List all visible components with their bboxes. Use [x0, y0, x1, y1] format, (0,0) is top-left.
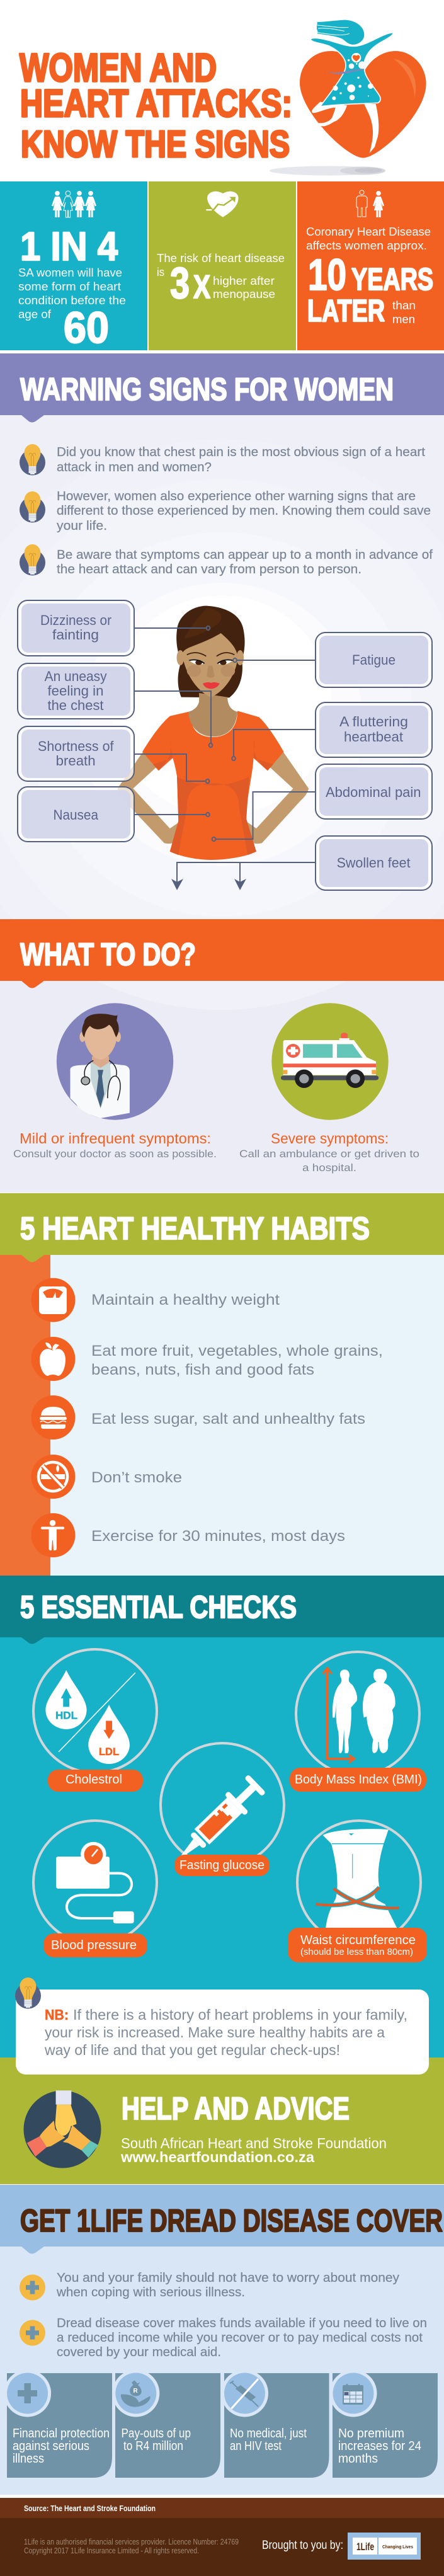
logo: 1Life: [348, 2533, 421, 2560]
panel: 3x higher risk statistic: [149, 181, 296, 350]
habit: eat more fruit and vegetables: [31, 1337, 383, 1381]
label: uneasy feeling in the chest: the chest: [48, 697, 103, 713]
label: shortness of breath: breath: [56, 753, 96, 769]
stat: 10 years later: LATER: [307, 294, 385, 328]
card: financial protection: illness: [13, 2452, 44, 2466]
text: SA women statistic: some form of heart: [18, 280, 121, 293]
card: financial protection: [4, 2370, 112, 2478]
callout: NB family history: If there is a history of heart problems in your family,: [73, 2006, 407, 2023]
stat: 3x: X: [193, 269, 210, 306]
text: mild symptoms: Consult your doctor as soon as possible.: [13, 1148, 217, 1160]
habit: maintain a healthy weight: [31, 1278, 280, 1322]
stat: 3x: 3: [170, 258, 190, 307]
section header: habits: 5 HEART HEALTHY HABITS: [20, 1211, 370, 1246]
text: coronary heart disease: than: [392, 299, 416, 312]
panel: 1 in 4 statistic: [0, 181, 147, 352]
title: WOMEN AND: [20, 46, 217, 90]
point: no worry about money: [20, 2271, 399, 2301]
label: abdominal pain: Abdominal pain: [326, 784, 421, 800]
label: nausea: [18, 787, 134, 842]
habit: don't smoke: [31, 1455, 182, 1499]
habit: eat more fruit and vegetables: Eat more fruit, vegetables, whole grains,: [91, 1342, 383, 1360]
icon: heart with rising arrow: [206, 192, 239, 217]
text: severe symptoms: Severe symptoms:: [271, 1130, 389, 1147]
logo: 1Life: 1Life: [356, 2541, 374, 2553]
card: no premium increases: No premium: [338, 2427, 404, 2441]
card: pay-outs: R: [134, 2388, 139, 2395]
point: funds available: a reduced income while you recover or to pay medical costs not: [57, 2331, 423, 2345]
panel: 1Life dread disease cover: [0, 2185, 444, 2495]
card: no premium increases: months: [338, 2452, 378, 2466]
label: uneasy feeling in the chest: An uneasy: [45, 668, 107, 684]
text: legal: Copyright 2017 1Life Insurance Limited - All rights reserved.: [24, 2546, 199, 2555]
check: blood pressure: Blood pressure: [51, 1938, 137, 1952]
panel: 5 essential checks: [0, 1576, 444, 2058]
check: cholesterol: LDL: [99, 1746, 119, 1758]
tip 1: attack in men and women?: [57, 461, 212, 474]
icon: ambulance: [271, 1003, 389, 1120]
tip 1: Did you know that chest pain is the most obvious sign of a heart: [57, 445, 425, 459]
card: no medical: No medical, just: [230, 2427, 307, 2441]
text: severe symptoms: Call an ambulance or get driven to: [239, 1148, 419, 1160]
text: foundation: [120, 2135, 387, 2165]
card: pay-outs: Pay-outs of up: [121, 2427, 191, 2441]
habit: exercise: Exercise for 30 minutes, most days: [91, 1528, 345, 1545]
text: coronary heart disease: Coronary Heart Disease: [306, 225, 431, 238]
label: uneasy feeling in the chest: feeling in: [48, 683, 103, 699]
label: fluttering heartbeat: heartbeat: [344, 729, 403, 745]
callout: NB family history: way of life and that you get regular check-ups!: [44, 2042, 340, 2058]
section header: habits: [0, 1193, 444, 1262]
text: SA women statistic: age of: [18, 307, 52, 321]
stat: 3x: [170, 258, 210, 307]
check: body mass index: [290, 1652, 426, 1792]
card: financial protection: against serious: [13, 2439, 89, 2453]
panel: help and advice: [0, 2058, 444, 2184]
panel: warning signs for women: [0, 353, 444, 919]
habit: exercise: [31, 1513, 345, 1557]
check: cholesterol: Cholestrol: [65, 1773, 122, 1787]
label: shortness of breath: [18, 726, 134, 781]
section header: dread disease cover: [0, 2185, 444, 2254]
text: risk of heart disease: higher after: [213, 274, 275, 287]
icon: four women: [52, 191, 96, 217]
title: KNOW THE SIGNS: [21, 123, 290, 165]
label: dizziness or fainting: fainting: [52, 627, 99, 643]
section header: warning signs: [0, 353, 444, 422]
text: SA women statistic: condition before the: [18, 294, 126, 307]
illustration: woman: [118, 606, 309, 860]
habit: don't smoke: Don’t smoke: [91, 1469, 182, 1486]
text: risk of heart disease: is: [157, 265, 164, 278]
callout: NB family history: NB:: [45, 2006, 69, 2023]
tip 2: your life.: [57, 519, 107, 533]
point: funds available: [20, 2316, 427, 2359]
tip 2: [20, 489, 431, 533]
card: pay-outs: to R4 million: [123, 2439, 183, 2453]
text: coronary heart disease: men: [392, 312, 415, 326]
check: fasting glucose: Fasting glucose: [179, 1858, 265, 1872]
panel: what to do: [0, 919, 444, 1193]
stat: 60: 60: [64, 303, 109, 352]
text: coronary heart disease: affects women approx.: [306, 239, 427, 252]
habit: maintain a healthy weight: Maintain a healthy weight: [91, 1291, 280, 1308]
callout: NB family history: [15, 1978, 429, 2075]
point: funds available: Dread disease cover makes funds available if you need to live on: [57, 2316, 427, 2330]
text: risk of heart disease: [157, 251, 285, 301]
title: [20, 46, 292, 165]
section header: checks: [0, 1576, 444, 1644]
habit: eat less sugar, salt and fat: [31, 1395, 365, 1440]
card: financial protection: Financial protection: [13, 2427, 110, 2441]
point: no worry about money: when coping with serious illness.: [56, 2286, 245, 2299]
card: no medical: [221, 2370, 329, 2478]
logo: 1Life: Changing Lives: [382, 2544, 413, 2550]
label: dizziness or fainting: [18, 600, 134, 656]
label: uneasy feeling in the chest: [18, 663, 134, 719]
label: fluttering heartbeat: A fluttering: [339, 714, 408, 730]
point: no worry about money: You and your family should not have to worry about money: [57, 2271, 399, 2285]
footer: [0, 2498, 444, 2576]
label: fluttering heartbeat: [316, 702, 432, 757]
check: waist circumference: (should be less than 80cm): [300, 1947, 413, 1957]
tip 2: However, women also experience other warning signs that are: [57, 489, 416, 503]
tip 3: [20, 544, 433, 576]
check: waist circumference: Waist circumference: [300, 1933, 416, 1947]
text: legal: 1Life is an authorised financial services provider. Licence Number: 24769: [24, 2538, 239, 2546]
tip 2: different to those experienced by men. Knowing them could save: [57, 504, 431, 518]
tip 1: [20, 444, 425, 475]
label: abdominal pain: [316, 764, 432, 819]
callout: NB family history: your risk is increased. Make sure healthy habits are a: [45, 2024, 385, 2041]
check: cholesterol: HDL: [55, 1710, 77, 1721]
stat: 1 in 4: 1 IN 4: [20, 224, 118, 269]
habit: eat less sugar, salt and fat: Eat less sugar, salt and unhealthy fats: [91, 1411, 365, 1428]
text: SA women statistic: SA women will have: [18, 266, 122, 279]
tip 3: the heart attack and can vary from person to person.: [57, 563, 361, 576]
panel: 5 heart healthy habits: [0, 1193, 444, 1576]
text: mild symptoms: Mild or infrequent symptoms:: [20, 1130, 211, 1147]
label: shortness of breath: Shortness of: [38, 738, 114, 754]
card: no premium increases: increases for 24: [338, 2439, 421, 2453]
section header: what to do: [0, 919, 444, 988]
check: cholesterol: [33, 1649, 157, 1792]
text: legal: [24, 2538, 239, 2555]
panel: 10 years later statistic: [297, 181, 444, 350]
habit: eat more fruit and vegetables: beans, nuts, fish and good fats: [91, 1361, 314, 1378]
text: mild symptoms: [13, 1130, 217, 1160]
section header: checks: 5 ESSENTIAL CHECKS: [20, 1589, 297, 1625]
check: waist circumference: [288, 1821, 427, 1962]
label: fatigue: Fatigue: [352, 652, 396, 668]
stat: 10 years later: [307, 250, 433, 328]
heading: help and advice: HELP AND ADVICE: [122, 2091, 350, 2126]
icon: woman leaping in front of heart: [270, 20, 426, 176]
text: source: Source: The Heart and Stroke Foundation: [24, 2504, 156, 2513]
point: funds available: covered by your medical aid.: [57, 2345, 221, 2359]
icon: doctor: [57, 1003, 173, 1120]
title: HEART ATTACKS:: [20, 82, 292, 125]
text: brought to you by: Brought to you by:: [262, 2539, 343, 2552]
text: severe symptoms: [239, 1130, 419, 1174]
label: fatigue: [316, 633, 432, 687]
text: SA women statistic: [18, 266, 126, 321]
text: foundation: South African Heart and Stroke Foundation: [121, 2135, 387, 2151]
check: fasting glucose: [161, 1743, 284, 1876]
text: coronary heart disease: [306, 225, 431, 326]
check: body mass index: Body Mass Index (BMI): [295, 1773, 422, 1787]
card: pay-outs: [112, 2370, 220, 2478]
text: risk of heart disease: The risk of heart disease: [157, 251, 285, 265]
stat: 10 years later: 10: [308, 250, 346, 299]
tip 3: Be aware that symptoms can appear up to a month in advance of: [57, 548, 433, 562]
icon: man and woman: [356, 190, 384, 217]
connector lines with markers: [134, 626, 316, 890]
label: dizziness or fainting: Dizziness or: [40, 612, 111, 628]
icon: joined hands: [24, 2090, 101, 2168]
text: severe symptoms: a hospital.: [302, 1162, 356, 1174]
label: nausea: Nausea: [53, 807, 99, 823]
card: no medical: an HIV test: [230, 2439, 282, 2453]
label: swollen feet: [316, 836, 432, 890]
check: blood pressure: [33, 1821, 157, 1957]
card: no premium increases: [330, 2370, 438, 2478]
label: swollen feet: Swollen feet: [337, 855, 411, 871]
section header: what to do: WHAT TO DO?: [20, 937, 196, 972]
text: risk of heart disease: menopause: [213, 287, 275, 301]
text: foundation: www.heartfoundation.co.za: [120, 2149, 314, 2165]
